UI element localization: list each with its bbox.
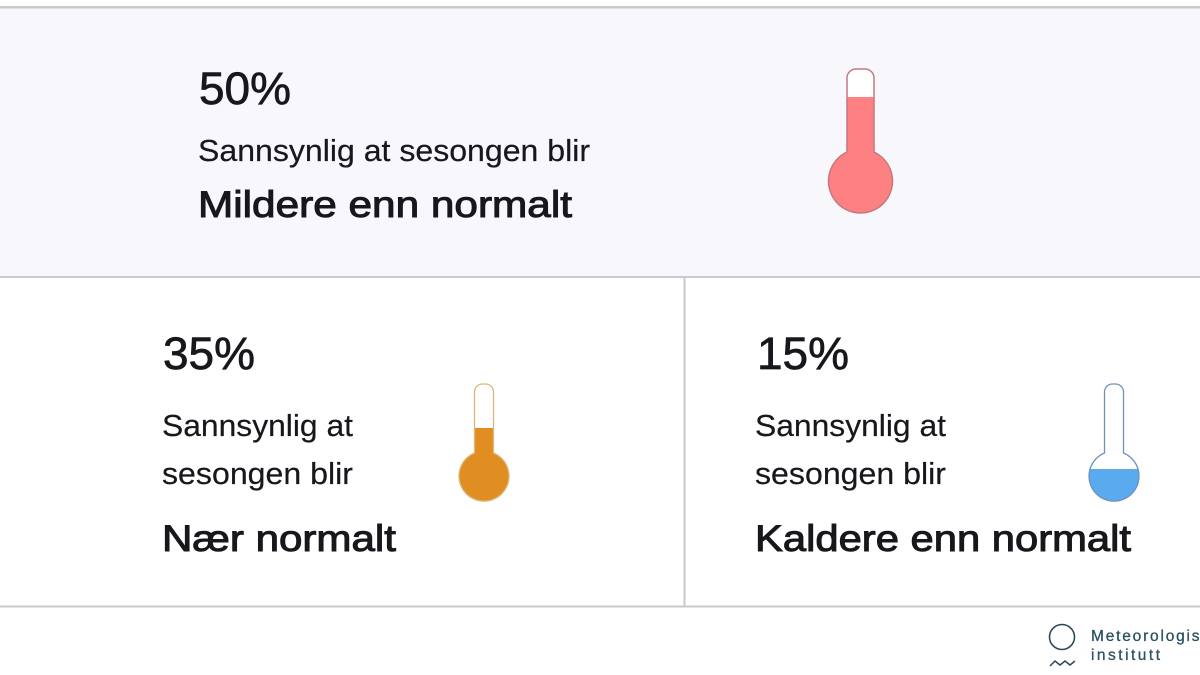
text: likelihood description: Sannsynlig at <box>162 408 353 443</box>
percentage: 15%: 15% <box>757 328 849 379</box>
panel: colder than normal <box>756 337 1140 552</box>
text: likelihood description: Sannsynlig at <box>755 408 946 443</box>
text: likelihood description, second line: sesongen blir <box>755 456 946 491</box>
percentage: 35%: 35% <box>163 328 255 379</box>
logo: Meteorologisk institutt <box>1050 624 1200 666</box>
text: likelihood description, second line: sesongen blir <box>162 456 353 491</box>
icon: red thermometer <box>828 68 894 214</box>
icon: orange thermometer <box>458 383 510 502</box>
panel: near normal <box>162 336 510 552</box>
heading: colder than normal: Kaldere enn normalt <box>755 518 1132 559</box>
icon: blue thermometer <box>1088 383 1140 502</box>
heading: near normal: Nær normalt <box>162 518 397 559</box>
text: likelihood description: Sannsynlig at sesongen blir <box>198 133 590 168</box>
icon: sun and waves <box>1050 624 1075 666</box>
heading: milder than normal: Mildere enn normalt <box>198 184 573 225</box>
panel: milder than normal <box>199 68 894 218</box>
text: organisation name, second line: institutt <box>1091 647 1161 664</box>
percentage: 50%: 50% <box>199 63 291 114</box>
